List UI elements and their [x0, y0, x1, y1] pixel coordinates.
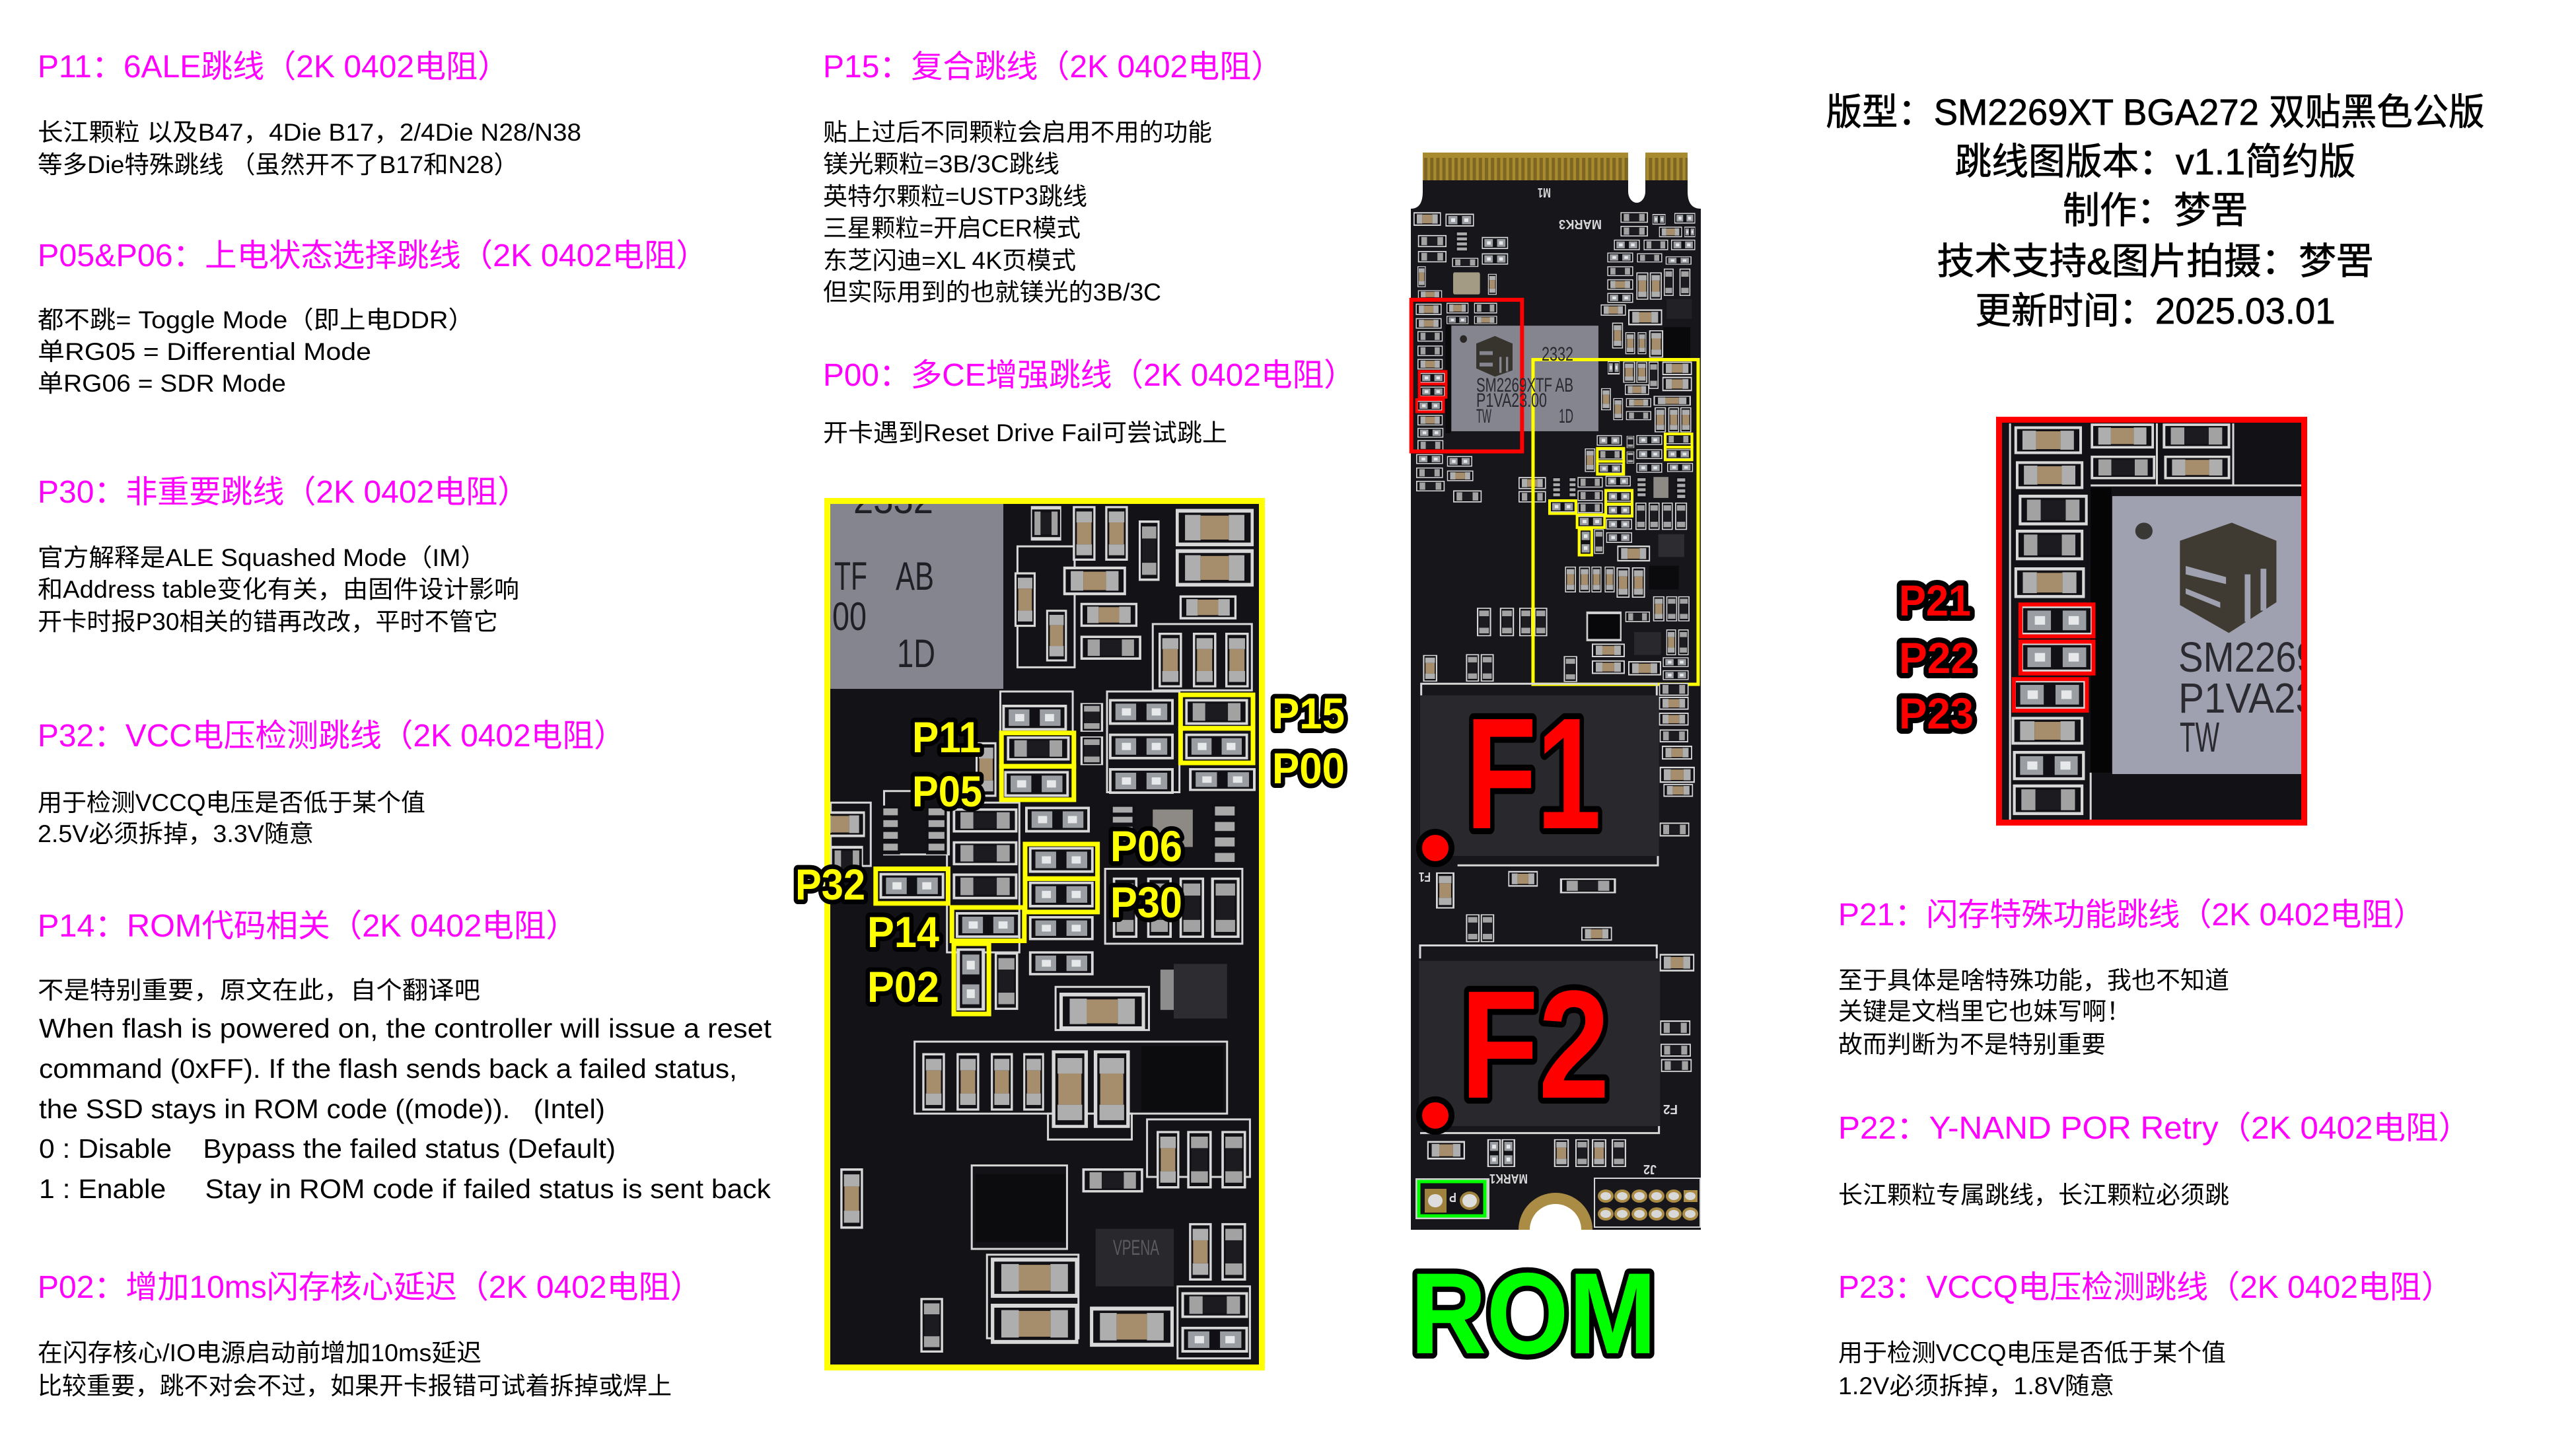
text block: P02: 在闪存核心/IO电源启动前增加10ms延迟	[38, 1339, 482, 1366]
silkscreen marks: MARK3	[1559, 217, 1602, 231]
text block: P11: 等多Die特殊跳线 （虽然开不了B17和N28）	[38, 151, 519, 178]
text block: P15: 但实际用到的也就镁光的3B/3C	[823, 279, 1161, 306]
text block: P30: 官方解释是ALE Squashed Mode（IM）	[38, 544, 486, 571]
jumper labels: P14	[867, 907, 939, 956]
text block: P14: When flash is powered on, the controller will issue a reset	[39, 1013, 772, 1044]
text block: P11: P11：6ALE跳线（2K 0402电阻）	[38, 50, 509, 85]
jumper labels: P06	[1110, 822, 1182, 870]
text block: P02: P02：增加10ms闪存核心延迟（2K 0402电阻）	[38, 1270, 702, 1305]
red frame	[1999, 420, 2304, 823]
text block: P21: 故而判断为不是特别重要	[1838, 1031, 2106, 1058]
close-up controller chip: TF	[834, 554, 867, 598]
labels P21 P22 P23: P21	[1899, 576, 1971, 625]
text block: P23: P23：VCCQ电压检测跳线（2K 0402电阻）	[1838, 1270, 2453, 1305]
small yellow jumper boxes	[1550, 434, 1692, 555]
jumper labels	[795, 689, 1345, 1011]
text block: P14: P14：ROM代码相关（2K 0402电阻）	[38, 909, 578, 944]
ROM jumper pads with green box: P	[1449, 1189, 1456, 1204]
silkscreen marks: M1	[1538, 185, 1551, 199]
close-up controller chip: 1D	[897, 631, 935, 676]
chip text	[2180, 642, 2301, 752]
close-up controller chip: 2332	[853, 478, 933, 522]
text block: P22	[1838, 1111, 2471, 1209]
jumper labels: P32	[795, 860, 865, 909]
text block: P15: 镁光颗粒=3B/3C跳线	[823, 151, 1059, 178]
text block: P02: 比较重要，跳不对会不过，如果开卡报错可试着拆掉或焊上	[38, 1372, 672, 1400]
title block: 跳线图版本：v1.1简约版	[1955, 141, 2355, 182]
controller chip and surrounding components	[1412, 212, 1698, 684]
text block: P21: 至于具体是啥特殊功能，我也不知道	[1838, 967, 2229, 994]
flash label F1: F1	[1466, 685, 1601, 862]
text block: P14	[38, 909, 772, 1204]
pin-1 dot F2	[1419, 1099, 1452, 1132]
jumper labels: P11	[912, 713, 981, 762]
label: ROM: ROM	[1410, 1250, 1657, 1378]
chip markings: TW	[1476, 406, 1491, 427]
red area box	[1412, 300, 1522, 452]
title block: 更新时间：2025.03.01	[1975, 290, 2336, 332]
flash chips and lower components	[1419, 683, 1695, 1167]
close-up controller chip: AB	[896, 554, 934, 598]
chip markings: 1D	[1559, 406, 1573, 427]
board outline	[1411, 153, 1701, 1230]
text block: P22: P22：Y-NAND POR Retry（2K 0402电阻）	[1838, 1111, 2471, 1146]
silkscreen marks: F2	[1663, 1102, 1678, 1116]
text block: P30	[38, 475, 529, 635]
text block: P32: 用于检测VCCQ电压是否低于某个值	[38, 789, 425, 816]
text block: P05 and P06: 单RG06 = SDR Mode	[38, 370, 286, 397]
text block: P30: 开卡时报P30相关的错再改改，平时不管它	[38, 608, 498, 635]
jumper labels: P15	[1272, 689, 1345, 738]
panel: PCB detail close-up with jumper labels	[795, 478, 1345, 1367]
chip text: P1VA23	[2178, 674, 2317, 722]
close-up photo	[2001, 423, 2317, 820]
text block: P05 and P06: 都不跳= Toggle Mode（即上电DDR）	[38, 306, 474, 334]
marking on VPENA chip: VPENA	[1113, 1236, 1159, 1259]
text block: P11	[38, 50, 581, 178]
gold fingers	[1423, 153, 1688, 180]
jumper labels: P30	[1110, 878, 1182, 927]
title block	[1826, 91, 2485, 332]
SMI logo	[2180, 522, 2276, 633]
labels P21 P22 P23: P23	[1899, 689, 1974, 738]
chip markings	[1476, 343, 1573, 427]
text block: P23: 1.2V必须拆掉，1.8V随意	[1838, 1372, 2114, 1400]
jumper labels: P00	[1272, 744, 1345, 793]
text block: P23	[1838, 1270, 2453, 1400]
text block: P32: 2.5V必须拆掉，3.3V随意	[38, 820, 314, 847]
title block: 版型：SM2269XT BGA272 双贴黑色公版	[1826, 91, 2485, 133]
labels P21 P22 P23: P22	[1899, 633, 1974, 682]
text block: P14: 0 : Disable Bypass the failed status (Default)	[39, 1133, 616, 1164]
text block: P14: command (0xFF). If the flash sends back a failed status,	[39, 1053, 737, 1084]
text block: P00: 开卡遇到Reset Drive Fail可尝试跳上	[823, 419, 1227, 446]
J2 connector pads	[1594, 1178, 1700, 1227]
title block: 技术支持&图片拍摄：梦罟	[1937, 240, 2374, 282]
jumper labels: P02	[867, 962, 939, 1011]
close-up controller chip: 00	[832, 594, 867, 639]
yellow area box	[1533, 359, 1698, 684]
chip markings: SM2269XTF AB	[1476, 374, 1573, 396]
text block: P14: 不是特别重要，原文在此，自个翻译吧	[38, 977, 480, 1004]
text block: P32	[38, 719, 626, 847]
silkscreen marks: J2	[1643, 1162, 1657, 1176]
pin-1 dot F1	[1419, 832, 1452, 864]
text block: P23: 用于检测VCCQ电压是否低于某个值	[1838, 1339, 2226, 1366]
mounting hole	[1513, 1193, 1598, 1269]
text block: P14: 1 : Enable Stay in ROM code if failed status is sent back	[39, 1174, 771, 1204]
red jumper boxes	[2014, 604, 2094, 711]
text block: P22: 长江颗粒专属跳线，长江颗粒必须跳	[1838, 1182, 2229, 1209]
silkscreen marks: F1	[1419, 869, 1431, 884]
ROM jumper pads with green box	[1415, 1178, 1489, 1219]
panel: full M.2 SSD board	[1411, 153, 1701, 1269]
text block: P30: 和Address table变化有关，由固件设计影响	[38, 576, 519, 603]
chip markings: 2332	[1542, 343, 1573, 365]
flash label F2: F2	[1460, 959, 1610, 1131]
text block: P02	[38, 1270, 702, 1400]
silkscreen marks: MARK1	[1489, 1171, 1528, 1186]
text block: P15: 贴上过后不同颗粒会启用不用的功能	[823, 119, 1212, 146]
text block: P32: P32：VCC电压检测跳线（2K 0402电阻）	[38, 719, 626, 754]
text block: P21: P21：闪存特殊功能跳线（2K 0402电阻）	[1838, 898, 2425, 933]
text block: P05 and P06: P05&P06：上电状态选择跳线（2K 0402电阻）	[38, 238, 708, 273]
text block: P30: P30：非重要跳线（2K 0402电阻）	[38, 475, 529, 510]
text block: P05 and P06	[38, 238, 708, 397]
text block: P00	[823, 358, 1355, 446]
title block: 制作：梦罟	[2063, 190, 2248, 231]
panel: controller close-up	[1899, 420, 2317, 823]
jumper labels: P05	[912, 767, 982, 816]
text block: P00: P00：多CE增强跳线（2K 0402电阻）	[823, 358, 1355, 393]
text block: P11: 长江颗粒 以及B47，4Die B17，2/4Die N28/N38	[38, 119, 581, 146]
text block: P15: 东芝闪迪=XL 4K页模式	[823, 247, 1076, 274]
labels P21 P22 P23	[1899, 576, 1974, 738]
text block: P14: the SSD stays in ROM code ((mode)). (Intel)	[39, 1094, 605, 1124]
close-up components	[816, 506, 1256, 1359]
text block: P21: 关键是文档里它也妹写啊！	[1838, 998, 2131, 1025]
small red jumper boxes	[1417, 371, 1446, 412]
close-up board photo	[816, 478, 1260, 1364]
chip text: TW	[2180, 713, 2219, 761]
text block: P21	[1838, 898, 2425, 1058]
chip text: SM2269	[2178, 633, 2317, 681]
SM logo	[1476, 336, 1513, 376]
text block: P05 and P06: 单RG05 = Differential Mode	[38, 338, 371, 365]
jumper highlight boxes	[876, 695, 1253, 1014]
text block: P15: 三星颗粒=开启CER模式	[823, 215, 1081, 242]
silkscreen marks	[1419, 185, 1678, 1186]
text block: P15: 英特尔颗粒=USTP3跳线	[823, 183, 1087, 210]
text block: P15	[823, 50, 1283, 306]
text block: P15: P15：复合跳线（2K 0402电阻）	[823, 50, 1283, 85]
yellow frame of close-up	[827, 501, 1262, 1367]
chip markings: P1VA23.00	[1476, 390, 1547, 411]
close-up controller chip	[830, 504, 1003, 689]
